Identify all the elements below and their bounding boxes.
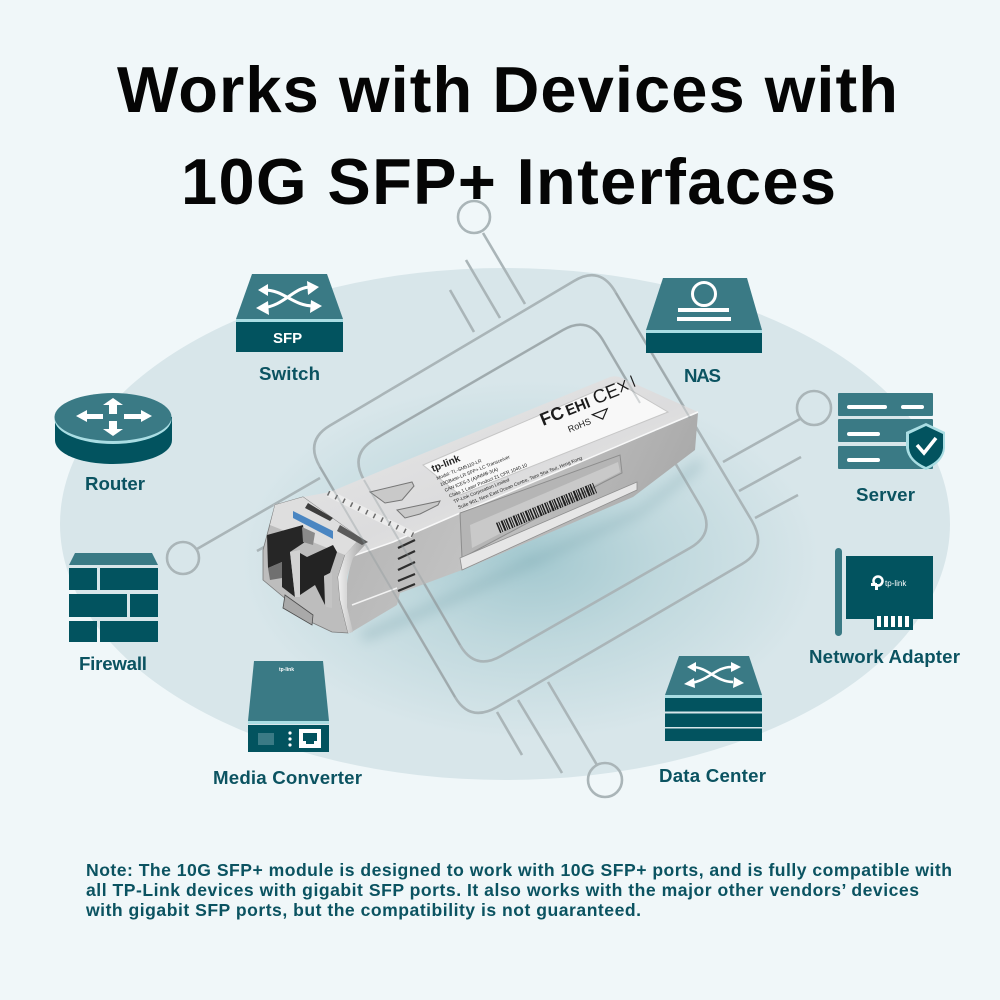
side face: [346, 413, 698, 633]
ellipse backdrop: [60, 268, 950, 780]
side recess and barcode: [460, 455, 637, 570]
product label: Class 1 Laser Product 21 CFR 1040.10: [448, 462, 528, 499]
label: media converter: Media Converter: [213, 767, 362, 788]
icon: server: [838, 393, 945, 470]
label: data center: Data Center: [659, 765, 766, 786]
icon: network adapter: [835, 548, 933, 636]
top face: [273, 376, 698, 556]
right connector lines: [723, 391, 831, 518]
label: NAS: NAS: [684, 365, 721, 386]
ridges: [328, 493, 413, 535]
product label: RoHS: [566, 416, 592, 434]
label: switch: Switch: [259, 363, 320, 384]
small pillar: [324, 572, 332, 608]
side fins: [398, 540, 415, 591]
product label: Suite 901, New East Ocean Centre, Tsim Sha Tsui, Hong Kong: [457, 455, 584, 511]
panel crease: [352, 588, 397, 605]
transceiver outline graphic: [167, 201, 831, 797]
icon: NAS: [646, 278, 762, 353]
top face highlight edge: [353, 412, 698, 556]
blue strip: [293, 511, 333, 539]
dark port left: [267, 525, 305, 597]
icon: router: [54, 393, 172, 464]
outline overlay on module: [320, 293, 690, 697]
product label: CE: [590, 380, 622, 409]
note text: with gigabit SFP ports, but the compatibility is not guaranteed.: [85, 900, 641, 920]
icon: switch: [236, 274, 343, 352]
bezel: [338, 538, 365, 633]
label: firewall: Firewall: [79, 653, 147, 674]
product label: TP-Link Corporation Limited: [453, 477, 511, 505]
drop shadow: [360, 458, 702, 642]
dark port right: [300, 545, 337, 605]
left connector lines: [167, 478, 320, 574]
product label: CAN ICES-3 (A)/NMB-3(A): [444, 467, 500, 494]
top plate lip: [270, 497, 360, 555]
icon: media converter: [248, 661, 329, 752]
product label: tp-link: [430, 453, 462, 475]
bottom latch: [283, 595, 313, 625]
product label: [423, 374, 668, 515]
icon: network adapter: tp-link: [885, 579, 907, 588]
cross piece: [302, 527, 315, 545]
lower left port interior: [268, 562, 282, 580]
product label: Model: TL-SM5110-LR: [436, 458, 483, 482]
note text: all TP-Link devices with gigabit SFP ports. It also works with the major other vendors’ devices: [86, 880, 919, 900]
label: server: Server: [856, 484, 915, 505]
SFP+ transceiver module: [263, 374, 702, 642]
top clips: [370, 482, 440, 518]
top connector lines: [450, 201, 525, 332]
label: router: Router: [85, 473, 145, 494]
note text: [85, 860, 952, 920]
title: Works with Devices with: [117, 53, 898, 126]
product label: 10GBase-LR SFP+ LC Transceiver: [439, 454, 511, 488]
icon: switch: SFP: [273, 330, 302, 347]
top slots: [305, 503, 368, 545]
title: [117, 53, 898, 218]
product label: EHI: [563, 394, 593, 420]
icon: firewall: [69, 553, 158, 642]
label: network adapter: Network Adapter: [809, 646, 960, 667]
product label: FC: [537, 402, 567, 430]
note text: Note: The 10G SFP+ module is designed to work with 10G SFP+ ports, and is fully compatible with: [86, 860, 952, 880]
front cage: [263, 497, 360, 633]
icon: data center: [665, 656, 762, 741]
icon: media converter: tp-link: [279, 667, 294, 673]
bottom connector lines: [497, 682, 622, 797]
shield: [906, 423, 945, 470]
title: 10G SFP+ Interfaces: [181, 145, 836, 218]
centre pillar: [290, 550, 300, 597]
